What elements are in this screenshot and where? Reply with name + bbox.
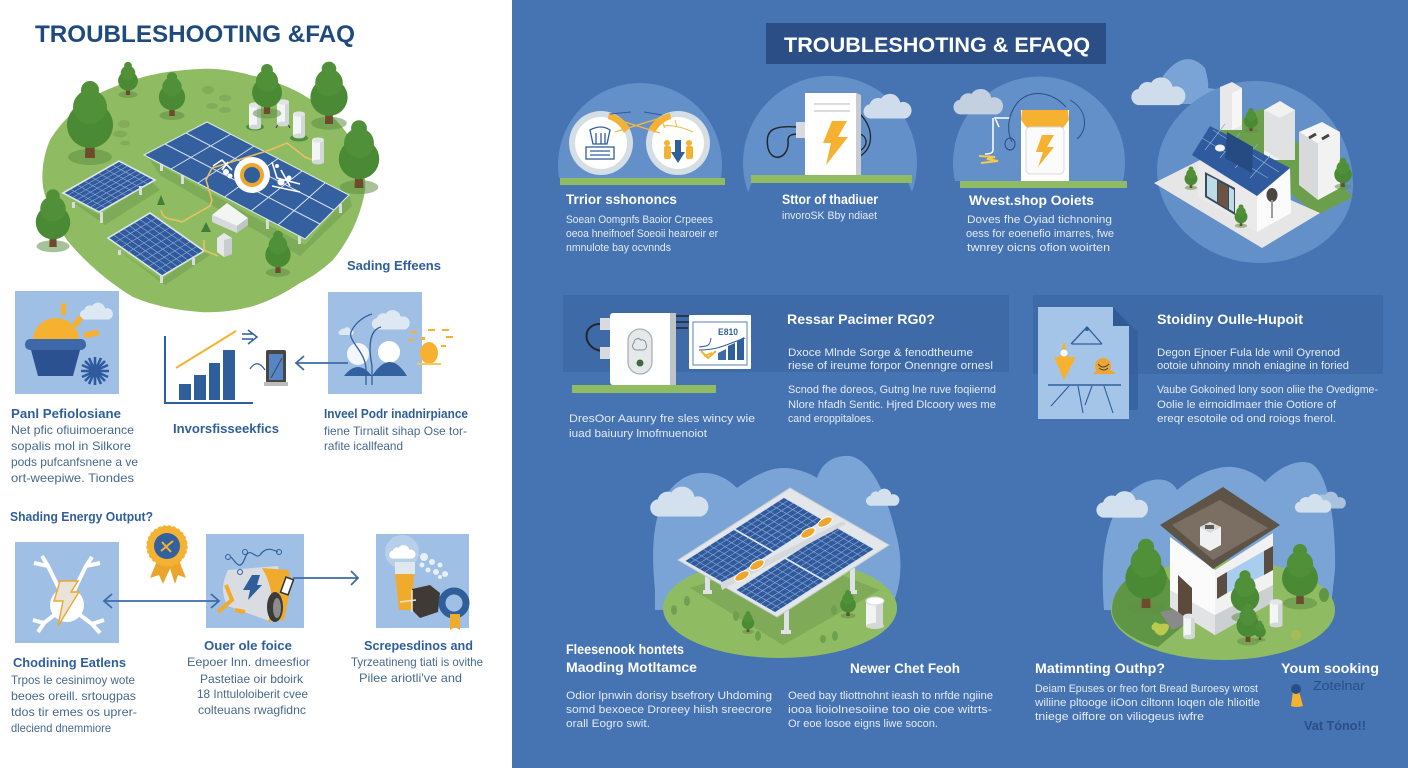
text: shading batteries	[11, 655, 137, 735]
text: status section: invoroSK Bby ndiaet	[782, 210, 877, 222]
text: overload force: Eepoer lnn. dmeesfior	[187, 655, 310, 669]
text: workshop section: Wvest.shop Ooiets	[969, 193, 1094, 208]
icon: inverter document with bolt	[743, 76, 917, 192]
text: shading batteries: tdos tir emes os uprer-	[11, 705, 137, 719]
text: panel performance: sopalis mol in Silkore	[11, 439, 131, 453]
illustration: house on green hill	[1096, 462, 1346, 660]
icon: phone monitor	[250, 350, 288, 386]
text: maintaining output: Deiam Epuses or freo fort Bread Buroesy wrost	[1035, 683, 1258, 695]
text: connector section: Trrior sshononcs	[566, 192, 677, 207]
trees and tanks	[1125, 539, 1329, 646]
chart: rising bar chart	[165, 330, 257, 403]
label: shading effects: Sading Effeens	[347, 258, 441, 273]
text: screening and	[351, 638, 483, 685]
text: device caption: DresOor Aaunry fre sles wincy wie	[569, 413, 755, 425]
label: inverter statistics: Invorsfisseekfics	[173, 421, 279, 436]
icon: pin bottle	[1291, 684, 1303, 707]
text: maintaining output: tniege oiffore on viliogeus iwfre	[1035, 711, 1204, 723]
small solar array left	[63, 161, 155, 223]
text: connector section: nmnulote bay ocvnnds	[566, 242, 671, 254]
text: connector section	[566, 192, 718, 254]
text: overload force	[187, 638, 310, 717]
large solar array legs	[160, 162, 342, 244]
text: overload force: Ouer ole foice	[204, 638, 292, 653]
text: shading output heading and body	[1157, 312, 1378, 425]
text: panel performance: Panl Pefiolosiane	[11, 406, 121, 421]
illustration: solar farm on green hill	[36, 62, 379, 312]
text: your seeking: Youm sooking	[1281, 661, 1379, 676]
text: reset heading and body	[787, 312, 996, 425]
text: newer chart section	[788, 661, 993, 730]
fault gear marker	[213, 157, 300, 193]
text: device caption: iuad baiuury lmofmuenoiot	[569, 428, 707, 440]
large solar array	[144, 122, 349, 239]
icon: screening tile	[376, 534, 469, 630]
panel: shading output band	[1033, 295, 1383, 425]
storage tank	[866, 597, 884, 629]
text: screening and: Screpesdinos and	[364, 638, 473, 653]
icon: battery tile	[206, 534, 304, 628]
text: panel performance: ort-weepiwe. Tiondes	[11, 471, 134, 485]
panel: left white background	[0, 0, 512, 768]
text: inverter maintenance	[324, 406, 468, 453]
green arrows	[157, 80, 271, 232]
small solar array bottom	[108, 213, 204, 283]
text: connector section: Soean Oomgnfs Baoior Crpeees	[566, 214, 713, 226]
heading: shading energy output: Shading Energy Output?	[10, 509, 153, 524]
text: flood maintenance section: somd bexoece Droreey hiish sreecrore	[566, 704, 772, 716]
text: reset heading and body: riese of ireume forpor Onenngre ornesl	[788, 360, 993, 372]
title: right banner: TROUBLESHOTING & EFAQQ	[784, 34, 1090, 57]
icon: workshop battery card	[953, 77, 1127, 188]
text: workshop section	[966, 193, 1114, 254]
panel: reset band	[563, 295, 1009, 440]
inverter box	[212, 203, 248, 233]
text: reset heading and body: Nlore hfadh Sentic. Hjred Dlcoory wes me	[788, 399, 996, 411]
text: shading output heading and body: Oolie le eirnoidlmaer thie Ootiore of	[1157, 399, 1337, 411]
text: inverter maintenance: fiene Tirnalit sihap Ose tor-	[324, 424, 467, 438]
text: shading output heading and body: ootoie uhnoiny mnoh eniagine in foried	[1157, 360, 1349, 372]
text: workshop section: oess for eoenefio imarres, fwe	[966, 228, 1114, 240]
text: connector section: oeoa hneifnoef Soeoii hearoeir er	[566, 228, 718, 240]
text: panel performance	[11, 406, 138, 485]
text: reset heading and body: cand eroppitaloes.	[788, 413, 874, 425]
arrow: monitor to inverter	[296, 356, 348, 370]
text: overload force: colteuans rwagfidnc	[198, 703, 306, 717]
text: shading output heading and body: Degon Ejnoer Fula lde wnil Oyrenod	[1157, 347, 1340, 359]
title: left heading: TROUBLESHOOTING &FAQ	[35, 21, 355, 48]
illustration: ground-mount solar array	[650, 456, 900, 658]
trees	[36, 62, 379, 277]
green hill	[42, 69, 365, 312]
solar modules	[678, 488, 889, 617]
text: screening and: Pilee ariotli've and	[359, 671, 462, 685]
text: overload force: Pastetiae oir bdoirk	[200, 672, 304, 686]
text: flood maintenance section: Fleesenook hontets	[566, 642, 684, 657]
arrow: battery to screening	[293, 571, 358, 585]
text: panel performance: Net pfic ofiuimoerance	[11, 423, 134, 437]
icon: connector comparison	[558, 83, 725, 185]
icon: fault bolt tile	[15, 542, 119, 643]
text: inverter maintenance: rafite icallfeand	[324, 439, 403, 453]
text: flood maintenance section: orall Eogro swit.	[566, 718, 650, 730]
text: newer chart section: Newer Chet Feoh	[850, 661, 960, 676]
icon: inverter maintenance tile	[328, 292, 453, 394]
icon: device and chart	[572, 313, 751, 393]
text: shading batteries: Trpos le cesinimoy wote	[11, 673, 135, 687]
panel shadows	[70, 160, 352, 285]
text: maintaining output: wiliine pltooge iiOon ciltonn loqen ole hlioitle	[1034, 697, 1260, 709]
text: shading batteries: dleciend dnemmiore	[11, 721, 111, 735]
text: shading output heading and body: Stoidiny Oulle-Hupoit	[1157, 312, 1304, 327]
text: reset heading and body: Ressar Pacimer RG0?	[787, 312, 935, 327]
text: status section: Sttor of thadiuer	[782, 192, 879, 207]
text: workshop section: Doves fhe Oyiad tichnoning	[967, 214, 1112, 226]
icon: faint shrubs	[113, 86, 231, 146]
text: maintaining output: Matimnting Outhp?	[1035, 661, 1165, 676]
text: flood maintenance section: Odior lpnwin dorisy bsefrory Uhdoming	[566, 690, 772, 702]
icon: device and chart: E810	[718, 327, 738, 337]
text: dark callout bottom: Vat Tóno!!	[1304, 718, 1366, 733]
text: workshop section: twnrey oicns ofion woirten	[967, 242, 1110, 254]
text: flood maintenance section: Maoding Motltamce	[566, 660, 697, 675]
text: newer chart section: iooa lioiolnesoiine too oie coe witrts-	[788, 704, 992, 716]
white storage tanks	[246, 99, 324, 164]
house roof	[1160, 487, 1280, 569]
text: dark callout top: Zotelnar	[1313, 679, 1365, 693]
text: maintaining output	[1034, 661, 1260, 723]
text: screening and: Tyrzeatineng tiati is ovithe	[351, 655, 483, 669]
small control box	[217, 233, 232, 257]
text: overload force: 18 Inttuloloiberit cvee	[197, 687, 308, 701]
text: newer chart section: Or eoe losoe eigns liwe socon.	[788, 718, 938, 730]
text: shading output heading and body: Vaube Gokoined lony soon oliie the Ovedigme-	[1157, 384, 1378, 396]
text: shading output heading and body: ereqr esotoile od ond roiogs fnerol.	[1157, 413, 1336, 425]
text: status section	[782, 192, 879, 222]
arrow: double arrow between tiles	[104, 594, 219, 608]
text: panel performance: pods pufcanfsnene a ve	[11, 455, 138, 469]
text: reset heading and body: Scnod fhe doreos, Gutng lne ruve foqiiernd	[788, 384, 996, 396]
text: shading batteries: beoes oreill. srtougpas	[11, 689, 136, 703]
illustration: solar house with buildings	[1131, 59, 1353, 263]
yellow cables	[161, 143, 318, 256]
icon: sun and pot tile	[15, 291, 119, 394]
text: reset heading and body: Dxoce Mlnde Sorge & fenodtheume	[788, 347, 973, 359]
text: inverter maintenance: Inveel Podr inadnirpiance	[324, 406, 468, 421]
text: newer chart section: Oeed bay tliottnohnt ieash to nrfde ngiine	[788, 690, 993, 702]
house walls	[1170, 533, 1273, 635]
text: device caption	[569, 413, 755, 440]
text: flood maintenance section	[566, 642, 772, 730]
text: shading batteries: Chodining Eatlens	[13, 655, 126, 670]
icon: document with diagram	[1038, 307, 1138, 419]
panel: right blue background	[512, 0, 1408, 768]
icon: award ribbon	[147, 526, 187, 584]
title: right banner	[766, 23, 1106, 64]
